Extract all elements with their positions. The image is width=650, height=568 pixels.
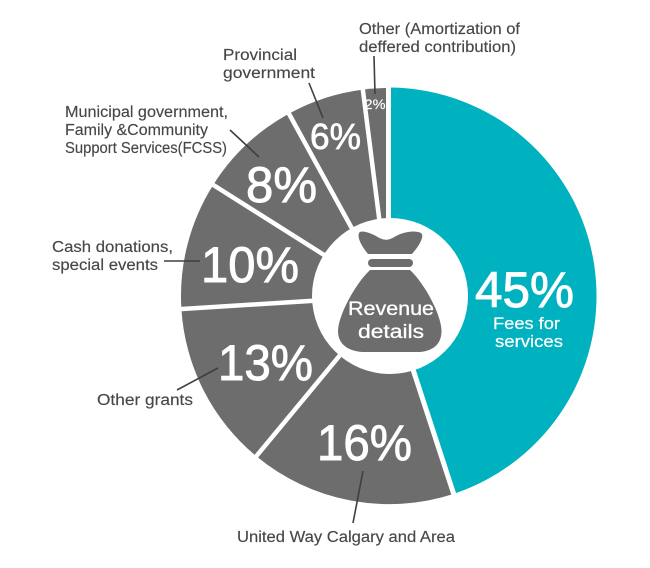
value: 45% fees for services xyxy=(475,262,574,351)
value: 45% fees for services: Fees for xyxy=(493,315,561,333)
label: municipal government xyxy=(65,104,228,157)
label: cash donations: special events xyxy=(52,257,158,274)
segment: other 2% xyxy=(363,88,389,296)
label: cash donations xyxy=(52,239,173,274)
leader lines xyxy=(164,56,375,523)
label: provincial government xyxy=(223,47,316,82)
label: other amortization: Other (Amortization of xyxy=(359,21,521,38)
label: municipal government: Family &Community xyxy=(65,122,208,139)
label: municipal government: Support Services(FCSS) xyxy=(65,140,227,157)
segment: municipal government 8% xyxy=(213,114,389,296)
value: 10%: 10% xyxy=(201,237,299,293)
value: 2%: 2% xyxy=(364,96,386,112)
segment: cash donations 10% xyxy=(181,185,389,309)
label: deferred contribution: deffered contribution) xyxy=(359,39,516,56)
donut chart xyxy=(174,80,597,504)
value: 45% fees for services: services xyxy=(495,333,563,351)
center circle xyxy=(312,218,468,374)
value: 13%: 13% xyxy=(218,335,313,391)
segment: fees for services 45% xyxy=(389,88,597,494)
value: 45% fees for services: 45% xyxy=(475,262,574,318)
label: municipal government: Municipal government, xyxy=(65,104,228,121)
icon: money bag xyxy=(338,232,442,352)
value: 6%: 6% xyxy=(310,116,361,157)
icon: money bag: details xyxy=(358,322,424,343)
value: 8%: 8% xyxy=(246,157,317,213)
label: provincial government: Provincial xyxy=(223,47,297,64)
segment: other grants 13% xyxy=(181,296,389,456)
center label: Revenue xyxy=(348,299,434,320)
label: cash donations: Cash donations, xyxy=(52,239,173,256)
segment: provincial government 6% xyxy=(289,90,389,296)
label: other grants: Other grants xyxy=(97,392,193,409)
segment: United Way 16% xyxy=(256,296,453,504)
label: United Way: United Way Calgary and Area xyxy=(237,529,455,546)
value: 16%: 16% xyxy=(317,415,412,471)
label: provincial government: government xyxy=(223,65,316,82)
